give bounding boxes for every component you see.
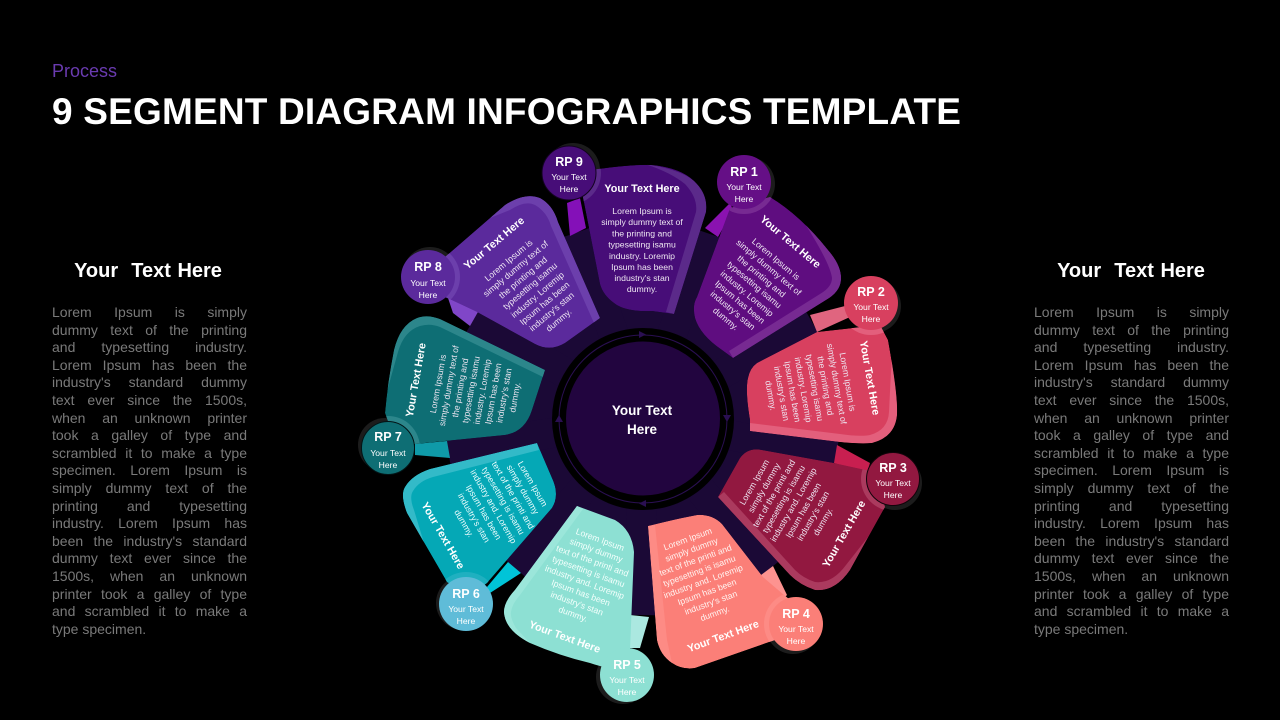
badge: Your Text xyxy=(370,448,406,458)
segment RP 8 xyxy=(396,196,600,350)
text: Your Text Here xyxy=(419,500,467,571)
text: industry's stan xyxy=(494,367,514,424)
text: Ipsum has been xyxy=(464,483,504,542)
text xyxy=(523,521,641,657)
left text block: simply dummy text of the xyxy=(52,480,247,496)
badge: RP 3 xyxy=(879,461,907,475)
text: dummy. xyxy=(627,284,657,294)
text: the printing and xyxy=(450,357,470,418)
right text block: Lorem Ipsum is simply xyxy=(1034,304,1229,320)
text: industry's stan xyxy=(549,589,605,618)
text xyxy=(729,443,871,573)
left text block: took a galley of type and xyxy=(52,427,247,443)
left text block: Lorem Ipsum is simply xyxy=(52,304,247,320)
badge xyxy=(866,452,920,506)
tab xyxy=(447,295,478,326)
hub label xyxy=(612,403,673,437)
badge shadow xyxy=(403,247,457,301)
text: Your Text Here xyxy=(404,342,429,418)
petal xyxy=(648,514,788,668)
text: industry and. Loremip xyxy=(768,466,819,543)
text: Your Text Here xyxy=(757,213,823,271)
badge xyxy=(769,597,823,651)
text xyxy=(601,183,683,294)
right text block: type specimen. xyxy=(1034,621,1128,637)
petal xyxy=(718,450,885,590)
text: typesetting isamu xyxy=(460,355,482,424)
text: dummy. xyxy=(811,506,835,537)
text: industry's stan xyxy=(527,290,576,333)
text: Ipsum has been xyxy=(550,577,612,608)
text: dummy. xyxy=(507,382,522,413)
text: simply dummy text of xyxy=(825,343,849,425)
text: text of the printi and xyxy=(490,460,537,531)
text: Ipsum has been xyxy=(782,360,803,423)
text: industry. Loremip xyxy=(509,270,566,320)
left text block: and typesetting industry. xyxy=(52,339,247,355)
segment RP 5 xyxy=(504,506,654,704)
text: the printing and xyxy=(735,253,788,299)
badge: RP 9 xyxy=(555,155,583,169)
tab xyxy=(630,615,649,648)
left text block: when an unknown printer xyxy=(52,410,247,426)
petal xyxy=(385,316,545,444)
text: Lorem Ipsum is xyxy=(838,352,858,413)
badge shadow xyxy=(596,650,650,704)
text: the printing and xyxy=(497,254,549,301)
hub label: Here xyxy=(627,422,657,437)
text xyxy=(403,338,527,438)
text: industry's stan xyxy=(456,491,492,544)
badge shadow xyxy=(766,600,820,654)
badge shadow xyxy=(436,576,490,630)
text: dummy. xyxy=(557,604,589,624)
left text block: type specimen. xyxy=(52,621,146,637)
segment diagram xyxy=(358,143,922,704)
text: industry. Loremip xyxy=(719,268,776,319)
section label: Process xyxy=(52,61,117,81)
right text block: scrambled it to make a type xyxy=(1034,445,1229,461)
left text block: and scrambled it to make a xyxy=(52,603,247,619)
text: dummy. xyxy=(452,508,476,539)
text: Lorem Ipsum xyxy=(516,459,550,508)
right text block: 1500s, when an unknown xyxy=(1034,568,1229,584)
petal xyxy=(403,443,556,584)
right text block: industry. Lorem Ipsum has xyxy=(1034,515,1229,531)
right text block: dummy text of the printing xyxy=(1034,322,1229,338)
text: Ipsum has been xyxy=(713,278,767,326)
text: simply dummy xyxy=(505,463,541,517)
text: industry and. Loremip xyxy=(662,562,744,600)
tab xyxy=(810,306,850,332)
text: Your Text Here xyxy=(604,183,680,195)
left text block: been the industry's standard xyxy=(52,533,247,549)
tab xyxy=(567,198,586,236)
text: typesetting isamu xyxy=(804,354,825,422)
badge shadow xyxy=(546,143,600,197)
badge: Here xyxy=(735,194,754,204)
text: typesetting is isamu xyxy=(662,553,737,589)
badge xyxy=(439,577,493,631)
badge shadow xyxy=(358,418,412,472)
badge: Here xyxy=(560,184,579,194)
tab xyxy=(415,441,450,458)
text: dummy. xyxy=(763,380,778,411)
text: simply dummy text of xyxy=(734,237,804,298)
petal xyxy=(694,197,841,358)
text: industry's stan xyxy=(708,289,757,332)
text: simply dummy text of xyxy=(437,344,461,427)
text: Ipsum has been xyxy=(611,262,673,272)
text: dummy. xyxy=(711,305,741,332)
right text block: Lorem Ipsum has been the xyxy=(1034,357,1229,373)
central hub with spokes xyxy=(448,232,836,615)
badge: Your Text xyxy=(853,302,889,312)
badge: RP 1 xyxy=(730,165,758,179)
right text block xyxy=(1034,304,1229,637)
right text block: been the industry's standard xyxy=(1034,533,1229,549)
badge shadow xyxy=(868,456,922,510)
text: text of the printi and xyxy=(751,458,797,529)
petal xyxy=(746,327,898,444)
right text block: and scrambled it to make a xyxy=(1034,603,1229,619)
segment RP 3 xyxy=(718,443,925,590)
tab xyxy=(487,562,521,593)
text: simply dummy text of xyxy=(481,238,551,299)
petal xyxy=(583,164,706,314)
text: Lorem Ipsum is xyxy=(428,353,448,414)
text: text of the printi and xyxy=(555,543,630,579)
left text block: printing and typesetting xyxy=(52,498,247,514)
badge xyxy=(600,648,654,702)
badge: RP 8 xyxy=(414,260,442,274)
text: typesetting isamu xyxy=(608,240,676,250)
text: simply dummy xyxy=(746,461,783,514)
text: dummy. xyxy=(544,307,573,334)
badge: Your Text xyxy=(726,182,762,192)
text: typesetting is isamu xyxy=(551,554,626,589)
left text block xyxy=(52,304,247,637)
text: Lorem Ipsum is xyxy=(483,237,535,283)
text: industry. Loremip xyxy=(472,358,493,425)
badge xyxy=(542,146,596,200)
text: Your Text Here xyxy=(820,499,868,570)
right text block: when an unknown printer xyxy=(1034,410,1229,426)
text: the printing and xyxy=(815,355,836,416)
badge xyxy=(717,155,771,209)
segment RP 6 xyxy=(403,443,558,636)
text: industry's stan xyxy=(772,365,791,422)
right text block: industry's standard dummy xyxy=(1034,374,1229,390)
badge: Here xyxy=(379,460,398,470)
right text block: printer took a galley of type xyxy=(1034,586,1229,602)
petal xyxy=(504,506,640,672)
badge shadow xyxy=(847,279,901,333)
text: typesetting isamu xyxy=(725,259,784,310)
left text block: industry's standard dummy xyxy=(52,374,247,390)
badge: RP 2 xyxy=(857,285,885,299)
left text block: scrambled it to make a type xyxy=(52,445,247,461)
badge xyxy=(362,422,414,474)
badge: Here xyxy=(419,290,438,300)
right text block: simply dummy text of the xyxy=(1034,480,1229,496)
segment RP 4 xyxy=(647,515,828,668)
left text block: specimen. Lorem Ipsum is xyxy=(52,462,247,478)
text: typesetting is isamu xyxy=(760,463,807,535)
text: dummy. xyxy=(699,603,731,623)
text: simply dummy xyxy=(664,535,720,564)
right text block: specimen. Lorem Ipsum is xyxy=(1034,462,1229,478)
text: simply dummy text of xyxy=(601,217,683,227)
text: Lorem Ipsum is xyxy=(612,206,672,216)
segment RP 9 xyxy=(537,141,706,314)
left text block: Lorem Ipsum has been the xyxy=(52,357,247,373)
tab xyxy=(834,445,870,473)
badge: Your Text xyxy=(448,604,484,614)
text: Ipsum has been xyxy=(676,577,738,607)
badge: Here xyxy=(787,636,806,646)
text: the printing and xyxy=(612,228,672,238)
text: Your Text Here xyxy=(857,340,882,416)
right text block: and typesetting industry. xyxy=(1034,339,1229,355)
hub label: Your Text xyxy=(612,403,673,418)
badge: Your Text xyxy=(609,675,645,685)
text: industry. Loremip xyxy=(609,251,675,261)
left heading: Your Text Here xyxy=(74,260,222,282)
text xyxy=(647,520,765,657)
text: simply dummy xyxy=(569,536,625,565)
text: industry's stan xyxy=(795,489,831,542)
left text block: printer took a galley of type xyxy=(52,586,247,602)
badge: Here xyxy=(884,490,903,500)
tab xyxy=(705,203,733,237)
segment RP 7 xyxy=(356,316,545,480)
text xyxy=(459,212,594,350)
right heading: Your Text Here xyxy=(1057,260,1205,282)
text: Ipsum has been xyxy=(783,481,823,540)
badge: RP 6 xyxy=(452,587,480,601)
badge shadow xyxy=(721,157,775,211)
badge xyxy=(844,276,898,330)
text: Lorem Ipsum xyxy=(662,526,713,552)
badge: Here xyxy=(618,687,637,697)
text: Ipsum has been xyxy=(483,362,503,425)
text: industry's stan xyxy=(614,273,670,283)
badge: Here xyxy=(862,314,881,324)
left text block: dummy text of the printing xyxy=(52,322,247,338)
text xyxy=(691,211,826,349)
text: Lorem Ipsum xyxy=(737,458,771,507)
text: Lorem Ipsum is xyxy=(750,236,802,282)
text: Your Text Here xyxy=(462,215,527,272)
left text block: industry. Lorem Ipsum has xyxy=(52,515,247,531)
text: industry and. Loremip xyxy=(468,468,519,545)
text: Lorem Ipsum xyxy=(575,526,626,553)
tab xyxy=(761,566,787,602)
text: typesetting isamu xyxy=(501,260,559,312)
right text block: text ever since the 1500s, xyxy=(1034,392,1229,408)
badge xyxy=(401,250,455,304)
petal xyxy=(446,196,600,348)
text xyxy=(759,337,882,437)
badge: Your Text xyxy=(778,624,814,634)
badge: RP 7 xyxy=(374,430,402,444)
badge: Your Text xyxy=(875,478,911,488)
right text block: printing and typesetting xyxy=(1034,498,1229,514)
right text block: dummy text ever since the xyxy=(1034,550,1229,566)
text: Your Text Here xyxy=(527,619,602,656)
title: 9 SEGMENT DIAGRAM INFOGRAPHICS TEMPLATE xyxy=(52,91,961,132)
text: industry and. Loremip xyxy=(544,563,626,601)
text: typesetting is isamu xyxy=(480,465,527,536)
text: text of the printi and xyxy=(658,542,733,578)
left text block: 1500s, when an unknown xyxy=(52,568,247,584)
badge: RP 4 xyxy=(782,607,810,621)
left text block: dummy text ever since the xyxy=(52,550,247,566)
right text block: took a galley of type and xyxy=(1034,427,1229,443)
badge: RP 5 xyxy=(613,658,641,672)
badge: Your Text xyxy=(410,278,446,288)
text: Your Text Here xyxy=(686,618,761,655)
badge: Your Text xyxy=(551,172,587,182)
left text block: text ever since the 1500s, xyxy=(52,392,247,408)
text: industry. Loremip xyxy=(793,356,814,423)
segment RP 2 xyxy=(747,271,903,443)
segment RP 1 xyxy=(691,150,841,358)
text xyxy=(416,445,558,575)
badge: Here xyxy=(457,616,476,626)
text: industry's stan xyxy=(683,588,739,617)
text: Ipsum has been xyxy=(518,279,572,327)
